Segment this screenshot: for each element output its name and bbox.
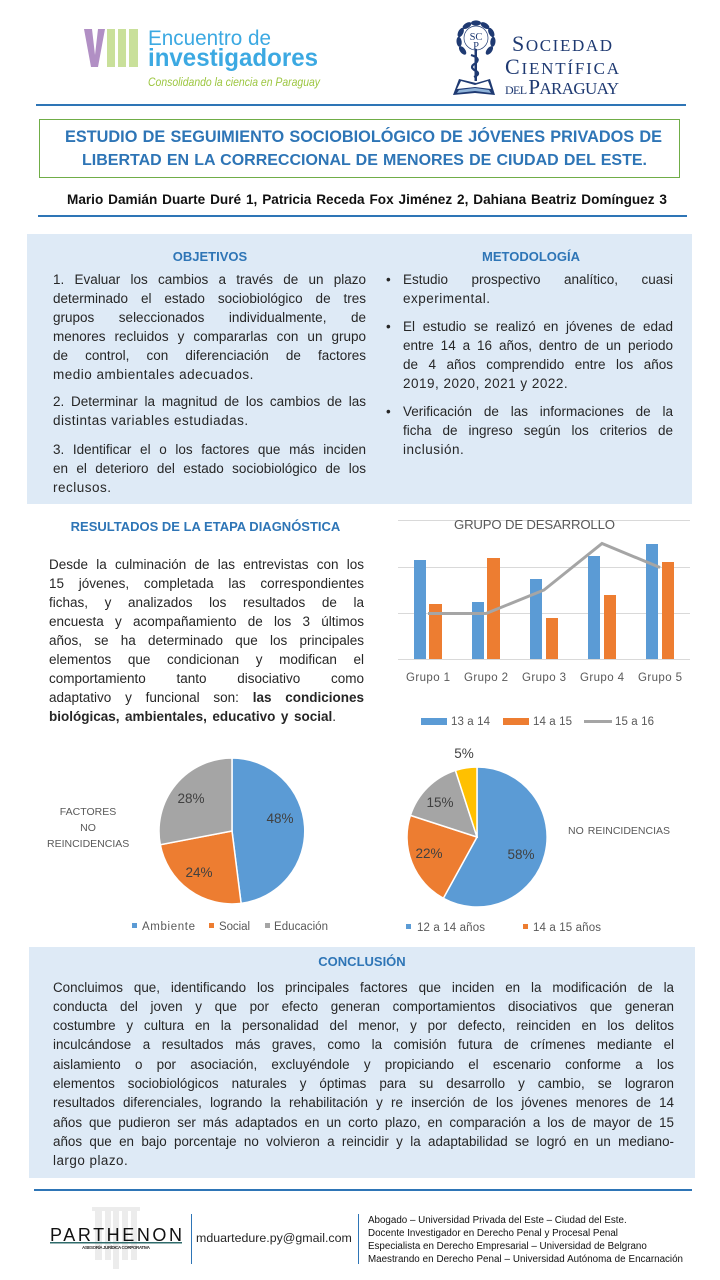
text: metodología: El estudio se realizó en jóvenes de edad (403, 318, 673, 334)
text: resultados: Desde la culminación de las entrevistas con los (49, 557, 364, 572)
logo: Sociedad Científica del Paraguay: P (473, 41, 479, 52)
logo: VIII Encuentro de investigadores: investigadores (148, 44, 318, 72)
panel: conclusión background (29, 947, 695, 1178)
text: objetivos: grupos seleccionados individualmente, de (53, 310, 366, 324)
contact email: mduartedure.py@gmail.com (196, 1231, 352, 1245)
text: conclusión: largo plazo. (53, 1153, 128, 1168)
text: metodología: ficha de ingreso según los criterios de (403, 422, 673, 438)
text: resultados: elementos que condicionan y modifican el (49, 652, 364, 667)
panel: objetivos y metodología background (27, 234, 692, 504)
text: resultados: años, se ha determinado que los principales (49, 633, 364, 648)
footer separator (191, 1214, 192, 1264)
text: resultados: 15 jóvenes, completada las correspondientes (49, 576, 364, 591)
legend: Social (219, 921, 250, 933)
text: conclusión: resultados diferenciales, logrando la rehabilitación y re inserción de los jóvenes menores de 14 (53, 1095, 674, 1110)
bar chart: grupo de desarrollo (398, 517, 690, 728)
text: conclusión: elementos sociobiológicos naturales y óptimas para su desarrollo y cambio, se lograron (53, 1076, 674, 1091)
text: metodología: entre 14 a 16 años, dentro de un periodo (403, 338, 673, 352)
axis labels: Grupo 1 (406, 672, 450, 684)
text: objetivos: reclusos. (53, 480, 112, 494)
pie chart: factores: 48% (266, 811, 294, 826)
pie chart: factores: 28% (177, 791, 205, 806)
logo: Sociedad Científica del Paraguay (453, 20, 620, 99)
text: resultados: biológicas, ambientales, educativo y social. (49, 709, 336, 724)
text: conclusión: conducta del joven y que por efecto generan comportamientos disociativos que generan (53, 999, 674, 1014)
top divider (36, 104, 686, 106)
text: objetivos: distintas variables estudiadas. (53, 412, 249, 428)
axis labels: Grupo 5 (638, 672, 682, 684)
text: • (386, 404, 391, 418)
text: objetivos: de control, con diferenciación de factores (53, 348, 366, 362)
legend (132, 921, 328, 933)
text: conclusión: años que en bajo porcentaje no volvieron a reincidir y la adaptabilidad se logró en un mediano- (53, 1134, 674, 1149)
text: conclusión: años que pudieron ser más adaptados en un corto plazo, en comparación a los de mayor de 15 (53, 1115, 674, 1130)
footer divider (34, 1189, 692, 1191)
legend: 12 a 14 años (417, 922, 485, 934)
title text (65, 127, 662, 169)
title text: LIBERTAD EN LA CORRECCIONAL DE MENORES DE CIUDAD DEL ESTE. (82, 152, 647, 169)
text: objetivos: medio ambientales adecuados. (53, 366, 254, 382)
pie chart: factores: 24% (185, 865, 213, 880)
pie chart label: factores no reincidencias: FACTORES (60, 806, 116, 818)
footer separator (358, 1214, 359, 1264)
logo: VIII Encuentro de investigadores: Encuentro de (148, 27, 271, 50)
logo: Sociedad Científica del Paraguay: SC (470, 32, 482, 43)
text: objetivos: determinado el estado sociobiológico de tres (53, 290, 366, 306)
title text: ESTUDIO DE SEGUIMIENTO SOCIOBIOLÓGICO DE JÓVENES PRIVADOS DE (65, 128, 662, 146)
axis labels: Grupo 4 (580, 672, 625, 684)
text: resultados: comportamiento tanto disociativo como (49, 671, 364, 686)
author credentials: Docente Investigador en Derecho Penal y Procesal Penal (368, 1228, 618, 1239)
logo: Parthenon (50, 1207, 182, 1269)
pie chart label: factores no reincidencias (47, 806, 129, 850)
logo: Sociedad Científica del Paraguay: SOCIEDAD (512, 31, 612, 56)
text: conclusión: costumbre y cultura en la personalidad del menor, y por defecto, reinciden en los delitos (53, 1018, 674, 1033)
text: resultados: encuesta y acompañamiento de los 3 últimos (49, 614, 364, 629)
axis labels: Grupo 3 (522, 672, 566, 684)
legend (406, 922, 601, 934)
logo: Parthenon: PARTHENON (50, 1225, 182, 1245)
logo: Sociedad Científica del Paraguay: DEL PARAGUAY (505, 75, 619, 99)
author credentials: Maestrando en Derecho Penal – Universidad Autónoma de Encarnación (368, 1254, 683, 1265)
text: objetivos: menores recluidos y compararlas con un grupo (53, 328, 366, 344)
text: metodología: de 4 años comprendido entre los años (403, 356, 673, 372)
axis labels: Grupo 2 (464, 672, 508, 684)
chart title: GRUPO DE DESARROLLO (454, 517, 615, 532)
logo: VIII Encuentro de investigadores (84, 27, 321, 89)
text: conclusión: aislamiento o por asociación, excluyéndole y propiciando el escenario conforme a los (53, 1057, 674, 1072)
legend (421, 716, 654, 728)
heading: metodología: METODOLOGÍA (482, 249, 580, 264)
text: resultados (49, 557, 364, 724)
bars: 13 a 14 (414, 544, 658, 659)
text: conclusión: Concluimos que, identificando los principales factores que inciden en la modificación de la (53, 980, 674, 994)
pie chart: factores (132, 758, 328, 933)
pie chart: no reincidencias: 58% (507, 847, 535, 862)
pie chart label: no reincidencias: NO REINCIDENCIAS (568, 825, 670, 837)
bars: 14 a 15 (429, 558, 674, 659)
heading: conclusión: CONCLUSIÓN (318, 954, 406, 969)
author credentials (368, 1215, 683, 1265)
legend: 15 a 16 (615, 716, 654, 728)
pie chart label: factores no reincidencias: REINCIDENCIAS (47, 838, 129, 850)
authors: Mario Damián Duarte Duré 1, Patricia Receda Fox Jiménez 2, Dahiana Beatriz Domínguez 3 (67, 192, 667, 207)
text: objetivos: 1. Evaluar los cambios a través de un plazo (53, 272, 366, 286)
text: metodología (386, 272, 673, 456)
line: 15 a 16 (428, 544, 660, 614)
logo: Sociedad Científica del Paraguay: CIENTÍFICA (505, 54, 620, 79)
text: objetivos (53, 272, 366, 494)
text: resultados: adaptativo y funcional son: las condiciones (49, 690, 364, 705)
pie chart: no reincidencias (406, 746, 601, 934)
title box (39, 119, 680, 178)
legend: Ambiente (142, 921, 195, 933)
legend: 13 a 14 (451, 716, 491, 728)
text: metodología: experimental. (403, 290, 491, 306)
text: objetivos: 3. Identificar el o los factores que más inciden (53, 442, 366, 456)
pie chart label: factores no reincidencias: NO (80, 822, 96, 834)
pie chart: no reincidencias: 5% (454, 746, 474, 761)
text: metodología: 2019, 2020, 2021 y 2022. (403, 376, 568, 390)
axis labels (406, 672, 682, 684)
pie chart: no reincidencias: 22% (415, 846, 443, 861)
text: objetivos: en el deterioro del estado sociobiológico de los (53, 460, 366, 476)
text: metodología: Estudio prospectivo analítico, cuasi (403, 272, 673, 286)
text: resultados: fichas, y analizados los resultados de la (49, 595, 364, 610)
legend: 14 a 15 años (533, 922, 601, 934)
heading: resultados: RESULTADOS DE LA ETAPA DIAGNÓSTICA (71, 519, 340, 534)
heading: objetivos: OBJETIVOS (173, 249, 247, 264)
author credentials: Especialista en Derecho Empresarial – Universidad de Belgrano (368, 1241, 647, 1252)
legend: Educación (274, 921, 328, 933)
text: metodología: Verificación de las informaciones de la (403, 404, 673, 418)
text: conclusión (53, 980, 674, 1168)
text: • (386, 318, 391, 334)
legend: 14 a 15 (533, 716, 572, 728)
pie chart: no reincidencias: 15% (426, 795, 454, 810)
logo: Parthenon: ASESORÍA JURÍDICA CORPORATIVA (82, 1243, 151, 1250)
text: objetivos: 2. Determinar la magnitud de los cambios de las (53, 394, 366, 408)
text: metodología: inclusión. (403, 442, 464, 456)
author divider (38, 215, 687, 217)
text: • (386, 272, 391, 286)
author credentials: Abogado – Universidad Privada del Este – Ciudad del Este. (368, 1215, 627, 1226)
text: conclusión: inculcándose a resultados más graves, como la comisión futura de crímenes mediante el (53, 1037, 674, 1052)
